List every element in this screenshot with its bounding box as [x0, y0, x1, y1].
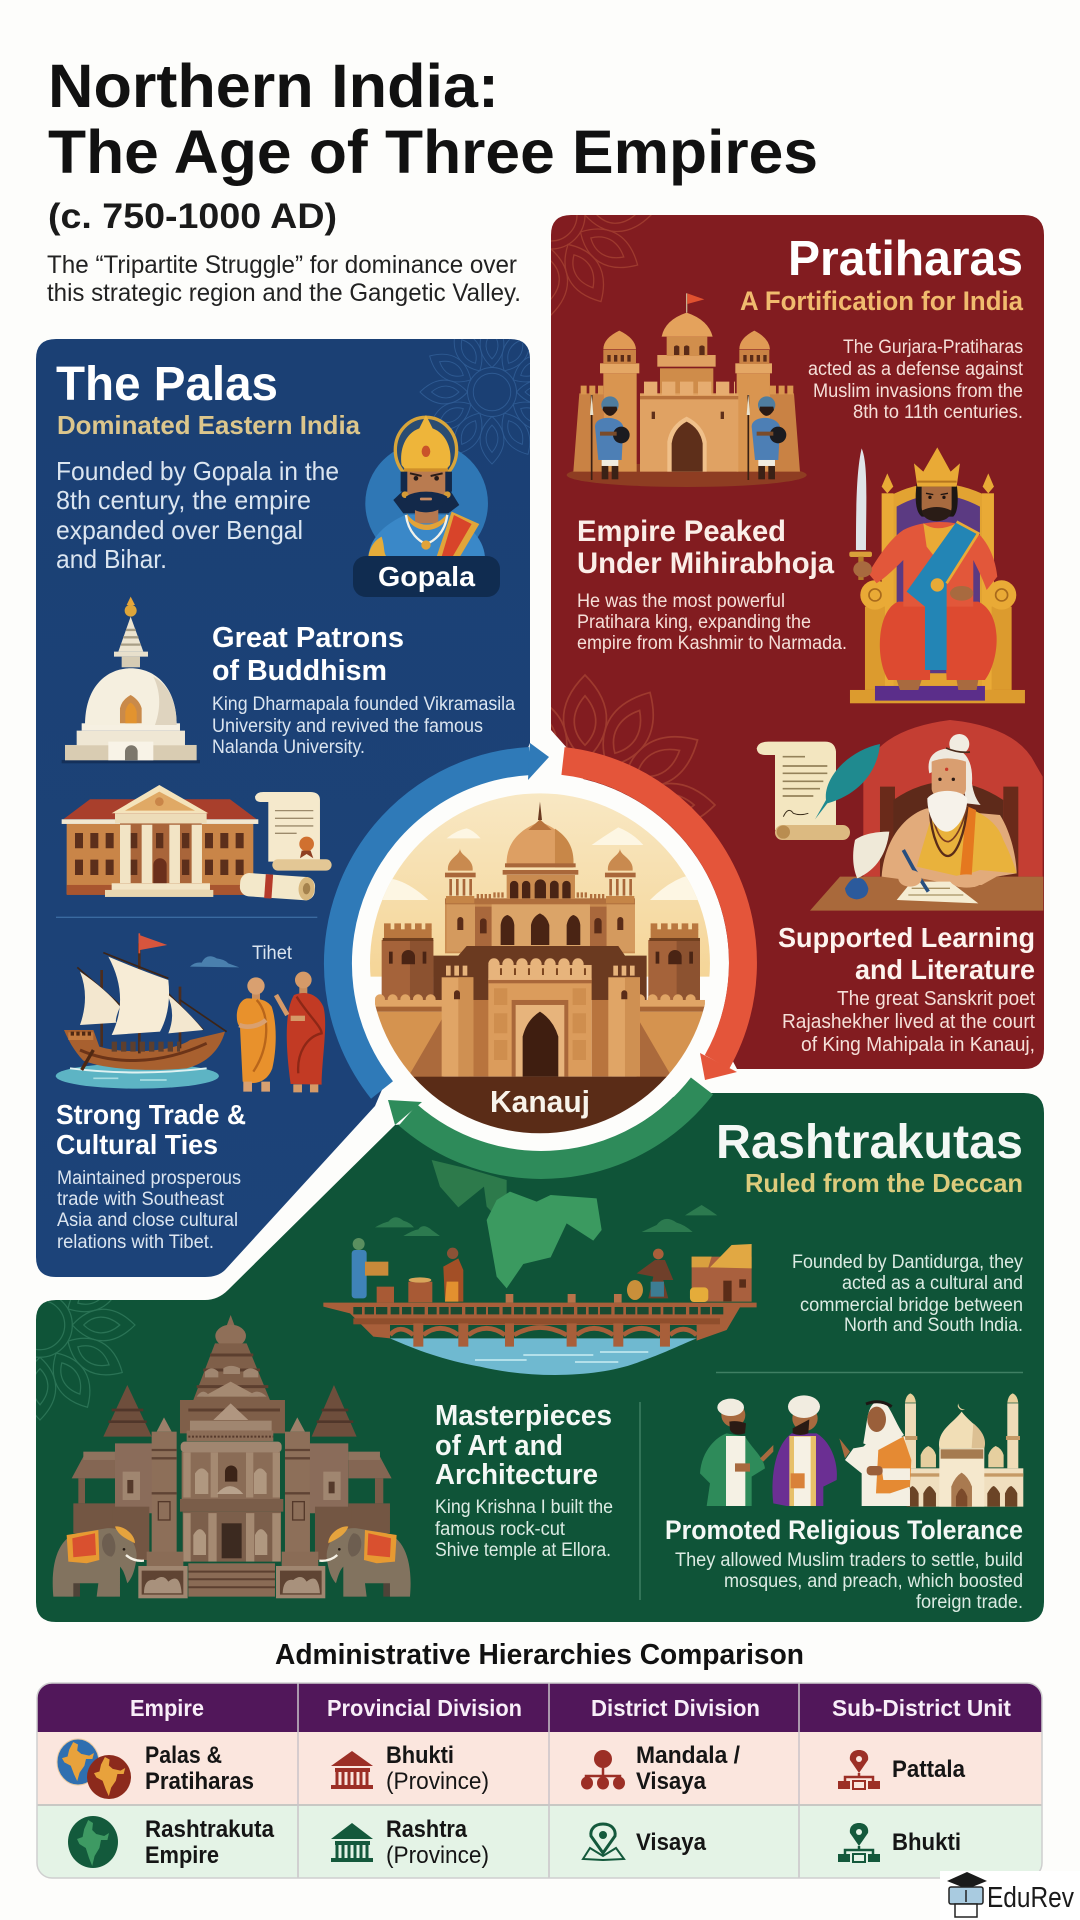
decorative mandalas: Pratiharas	[451, 115, 715, 935]
icon: fort with guards	[567, 293, 807, 487]
table headers	[130, 1695, 1011, 1721]
text: Buddhism patronage: University and revived the famous	[212, 716, 483, 737]
text: bridge role: Founded by Dantidurga, they	[792, 1252, 1023, 1273]
heading: Promoted Religious Tolerance: Promoted Religious Tolerance	[665, 1515, 1023, 1545]
heading: Great Patrons of Buddhism: Great Patrons	[212, 622, 404, 654]
heading: Supported Learning and Literature: Supported Learning	[778, 922, 1035, 953]
arrow: Palas to Pratiharas	[338, 743, 549, 1090]
heading: Strong Trade & Cultural Ties: Strong Trade &	[56, 1099, 246, 1130]
text: Rajashekher	[782, 988, 1035, 1056]
row: Palas and Pratiharas: Palas &	[145, 1742, 222, 1769]
heading: Supported Learning and Literature: and Literature	[855, 954, 1035, 985]
icon: EduRev mascot	[947, 1872, 987, 1917]
text: tolerance: foreign trade.	[916, 1592, 1023, 1613]
row: Rashtrakuta Empire: Bhukti	[892, 1829, 961, 1856]
heading: Empire Peaked Under Mihirabhoja	[577, 515, 834, 580]
logo: EduRev	[940, 1871, 1080, 1920]
row: Rashtrakuta Empire: (Province)	[386, 1842, 489, 1869]
icon: trading ship	[56, 917, 317, 1089]
text: defense role: The Gurjara-Pratiharas	[843, 337, 1023, 358]
row: Palas and Pratiharas	[145, 1742, 966, 1795]
text: Ellora: Shive temple at Ellora.	[435, 1540, 611, 1561]
text: Mihirabhoja	[577, 591, 847, 654]
row: Palas and Pratiharas: Pattala	[892, 1756, 966, 1783]
text: defense role: 8th to 11th centuries.	[853, 402, 1023, 423]
text: Ellora: famous rock-cut	[435, 1519, 566, 1540]
label: Gopala	[353, 556, 500, 597]
text: bridge role: North and South India.	[844, 1315, 1023, 1336]
text: Buddhism patronage	[212, 694, 515, 758]
icon: Gopala portrait	[365, 415, 488, 565]
text: founding: 8th century, the empire	[56, 485, 311, 515]
icon: map and trade bridge	[323, 1160, 757, 1375]
text: bridge role: commercial bridge between	[800, 1295, 1023, 1316]
decorative mandala: Palas	[420, 339, 530, 464]
row: Rashtrakuta Empire: Rashtrakuta	[145, 1816, 275, 1843]
panel: Pratiharas	[551, 215, 1044, 1069]
icon: monks	[237, 972, 325, 1088]
label: Gopala: Gopala	[378, 561, 475, 592]
text: Rajashekher: The great Sanskrit poet	[837, 988, 1035, 1010]
row: Rashtrakuta Empire: Visaya	[636, 1829, 707, 1856]
row: Rashtrakuta Empire: Empire	[145, 1842, 219, 1869]
heading: table title: Administrative Hierarchies Comparison	[275, 1639, 804, 1671]
table header row	[37, 1683, 1042, 1732]
text: founding	[56, 456, 339, 574]
heading: Strong Trade & Cultural Ties: Cultural Ties	[56, 1129, 218, 1160]
central medallion: Kanauj	[338, 743, 743, 1165]
title	[48, 52, 818, 186]
row: Palas and Pratiharas: Mandala /	[636, 1742, 740, 1769]
table headers: District Division	[591, 1695, 760, 1721]
panel: The Palas	[36, 320, 564, 1277]
icon: Visaya map pin	[583, 1824, 624, 1860]
heading: The Palas: The Palas	[56, 358, 278, 411]
text: trade: Asia and close cultural	[57, 1210, 238, 1231]
text: Ellora: King Krishna I built the	[435, 1497, 613, 1518]
text: bridge role	[792, 1252, 1023, 1336]
decorative mandala: Rashtrakutas	[36, 1300, 136, 1420]
icon: Palas and Pratiharas maps	[57, 1739, 131, 1799]
text: Buddhism patronage: King Dharmapala founded Vikramasila	[212, 694, 515, 715]
heading: Empire Peaked Under Mihirabhoja: Under Mihirabhoja	[577, 547, 834, 580]
text: tolerance: mosques, and preach, which boosted	[724, 1571, 1023, 1592]
text: tolerance: They allowed Muslim traders to settle, build	[675, 1550, 1023, 1571]
icon: Mihirabhoja on throne	[849, 447, 1025, 703]
title: The Age of Three Empires	[48, 118, 818, 186]
row: Palas and Pratiharas: Visaya	[636, 1768, 707, 1795]
row: Rashtrakuta Empire: Rashtra	[386, 1816, 468, 1843]
intro text: The “Tripartite Struggle” for dominance over	[47, 251, 517, 279]
text: founding: and Bihar.	[56, 544, 167, 574]
subheading: Ruled from the Deccan: Ruled from the Deccan	[745, 1168, 1023, 1198]
heading: Empire Peaked Under Mihirabhoja: Empire Peaked	[577, 515, 786, 548]
heading: Great Patrons of Buddhism: of Buddhism	[212, 655, 387, 687]
heading: Rashtrakutas: Rashtrakutas	[716, 1116, 1023, 1169]
illustration: Kanauj fort	[367, 790, 713, 1150]
text: founding: Founded by Gopala in the	[56, 456, 339, 486]
icon: stupa	[62, 597, 200, 763]
row: Palas and Pratiharas: Bhukti	[386, 1742, 454, 1769]
icon: traders and mosque	[700, 1393, 1023, 1507]
intro text	[47, 251, 521, 307]
text: tolerance	[675, 1550, 1023, 1613]
arrow: Pratiharas to Rashtrakutas	[563, 761, 743, 1080]
text: trade: Maintained prosperous	[57, 1168, 241, 1189]
label: Tibet: Tihet	[252, 943, 293, 964]
text: bridge role: acted as a cultural and	[842, 1273, 1023, 1294]
text: Rajashekher: Rajashekher lived at the court	[782, 1011, 1035, 1033]
text: defense role: Muslim invasions from the	[813, 381, 1023, 402]
subtitle: date range: (c. 750-1000 AD)	[48, 197, 337, 236]
heading: Masterpieces of Art and Architecture: of Art and	[435, 1430, 563, 1462]
subheading: Dominated Eastern India: Dominated Eastern India	[57, 410, 361, 440]
text: Rajashekher: of King Mahipala in Kanauj,	[801, 1034, 1035, 1056]
intro text: this strategic region and the Gangetic Valley.	[47, 279, 521, 307]
table headers: Sub-District Unit	[832, 1695, 1011, 1721]
text: Mihirabhoja: He was the most powerful	[577, 591, 785, 612]
panel: Rashtrakutas	[0, 1093, 1044, 1622]
icon: Pattala hierarchy	[838, 1750, 880, 1789]
icon: rock-cut temple with elephants	[53, 1315, 411, 1598]
heading: Masterpieces of Art and Architecture: Masterpieces	[435, 1400, 612, 1432]
icon: Rashtrakuta map	[68, 1816, 118, 1868]
text: trade: trade with Southeast	[57, 1189, 225, 1210]
text: Mihirabhoja: empire from Kashmir to Narmada.	[577, 633, 847, 654]
text: trade	[57, 1168, 241, 1253]
text: Mihirabhoja: Pratihara king, expanding the	[577, 612, 811, 633]
row: Palas and Pratiharas: (Province)	[386, 1768, 489, 1795]
icon: poet Rajashekhar writing	[757, 720, 1043, 911]
icon: Rashtra temple	[331, 1823, 373, 1862]
icon: Mandala hierarchy	[581, 1750, 625, 1790]
icon: Bhukti temple	[331, 1751, 373, 1789]
subheading: A Fortification for India: A Fortification for India	[740, 286, 1024, 316]
heading: Supported Learning and Literature	[778, 922, 1035, 985]
row: Palas and Pratiharas: Pratiharas	[145, 1768, 254, 1795]
text: defense role	[808, 337, 1024, 423]
heading: Masterpieces of Art and Architecture	[435, 1400, 612, 1491]
arrow: Rashtrakutas to Palas	[388, 1086, 702, 1165]
text: Ellora	[435, 1497, 613, 1561]
icon: university building and scrolls	[62, 785, 332, 902]
title: Northern India:	[48, 52, 499, 120]
text: founding: expanded over Bengal	[56, 515, 303, 545]
heading: Great Patrons of Buddhism	[212, 622, 404, 687]
text: Buddhism patronage: Nalanda University.	[212, 737, 365, 758]
table headers: Empire	[130, 1695, 204, 1721]
row: Rashtrakuta Empire	[145, 1816, 961, 1869]
heading: Masterpieces of Art and Architecture: Architecture	[435, 1459, 598, 1491]
text: trade: relations with Tibet.	[57, 1232, 214, 1253]
table headers: Provincial Division	[327, 1695, 522, 1721]
text: defense role: acted as a defense against	[808, 359, 1024, 380]
heading: Pratiharas: Pratiharas	[788, 232, 1023, 286]
table: administrative hierarchies	[37, 1683, 1042, 1878]
label: Kanauj: Kanauj	[490, 1084, 590, 1119]
heading: Strong Trade & Cultural Ties	[56, 1099, 246, 1160]
icon: Bhukti hierarchy	[838, 1823, 880, 1862]
